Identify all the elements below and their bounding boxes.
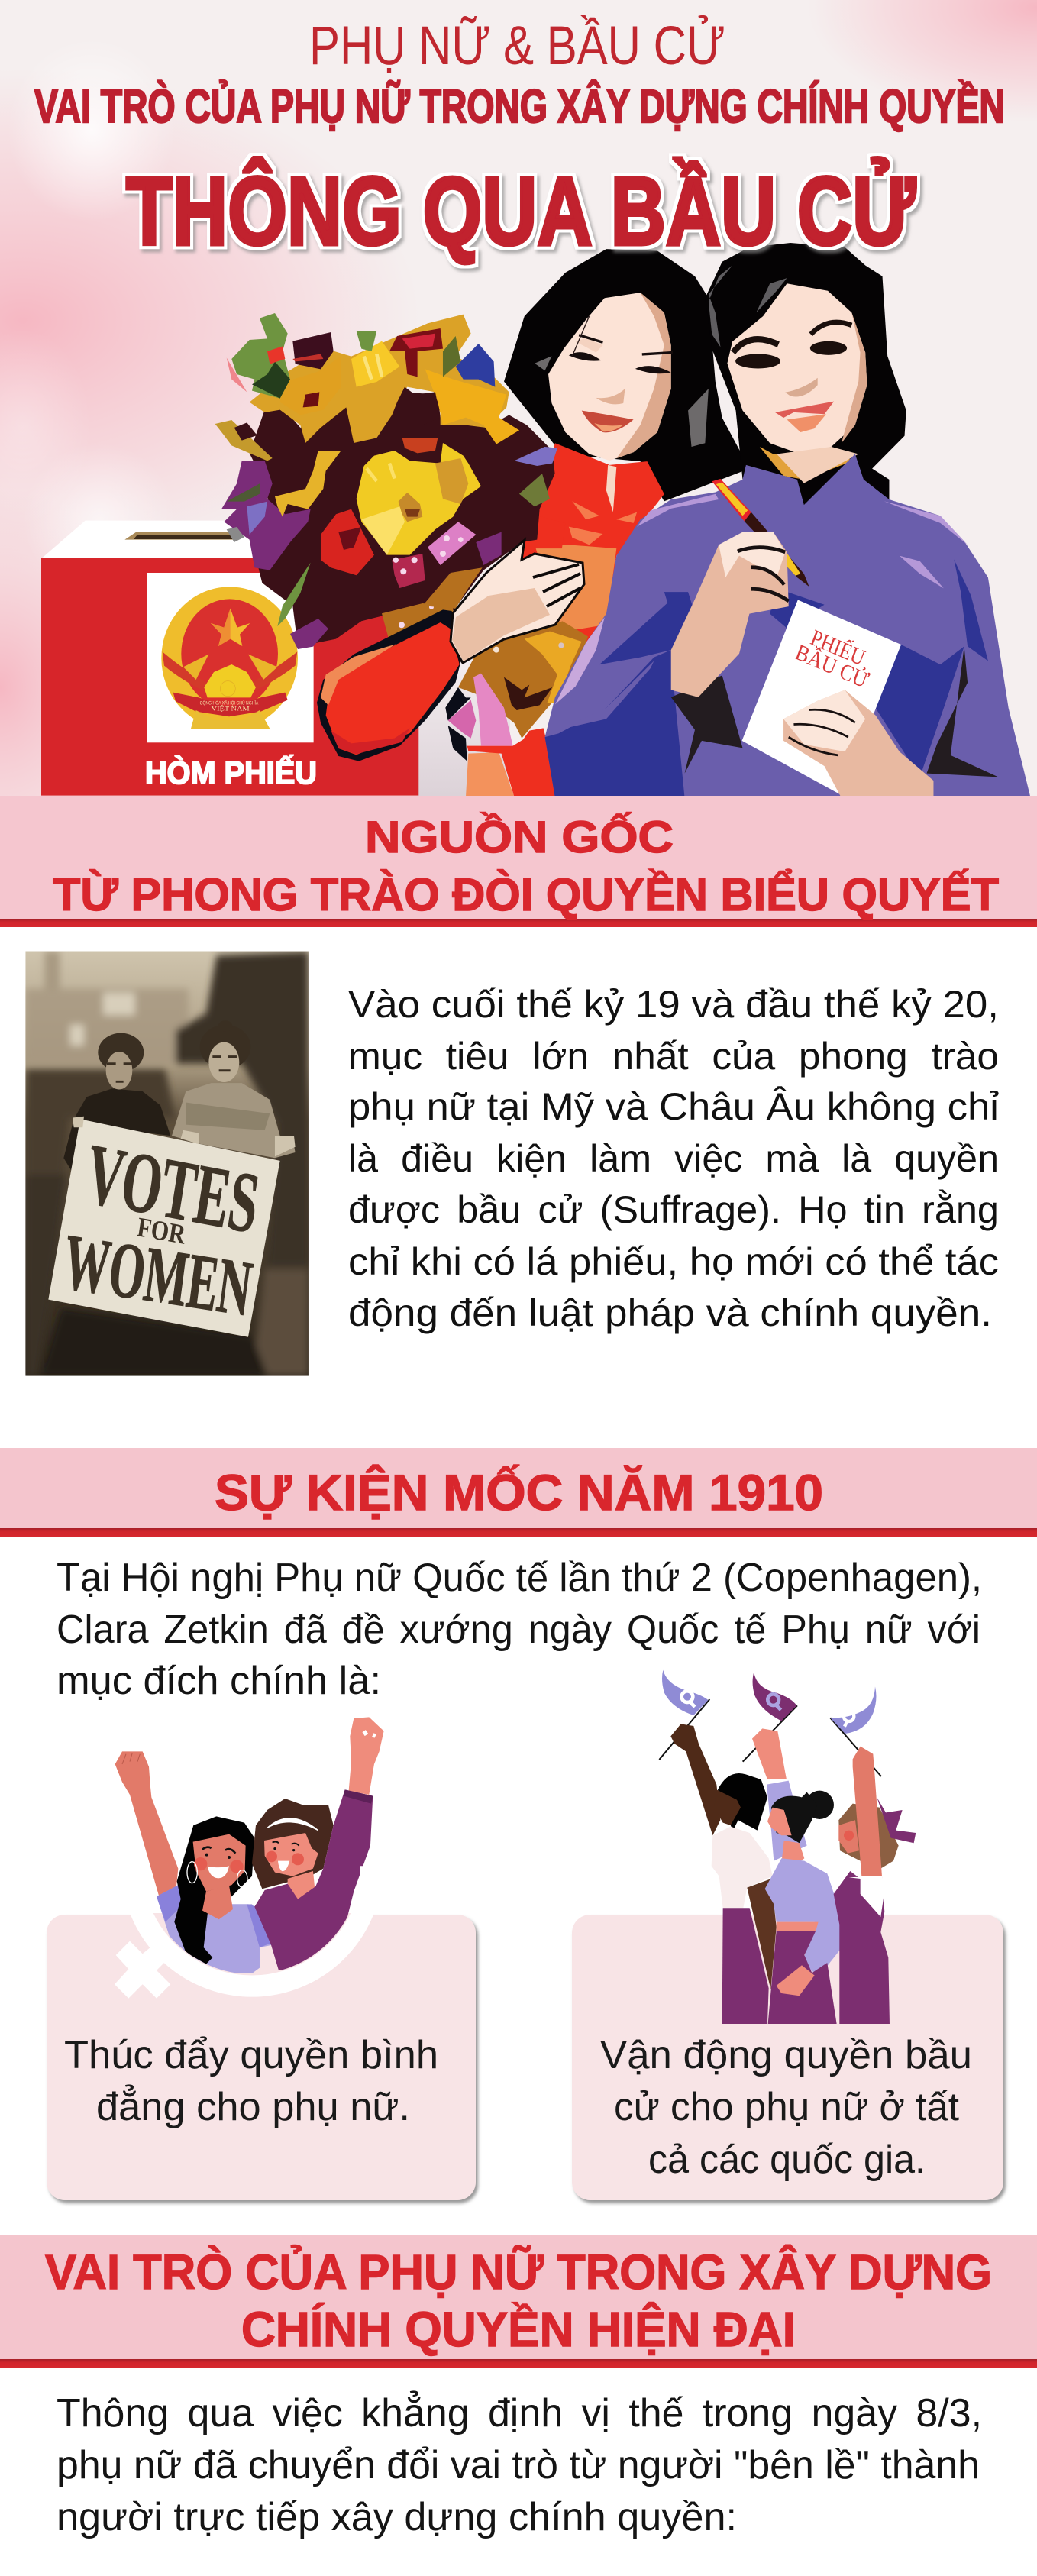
- banner: [48, 1117, 296, 1337]
- paragraph: modern role: [57, 2390, 982, 2539]
- hand holding pen: [671, 532, 789, 697]
- banner: FOR: [135, 1211, 188, 1250]
- section header: modern role: CHÍNH QUYỀN HIỆN ĐẠI: [241, 2301, 796, 2357]
- illustration: ballot paper: PHIẾU: [807, 623, 869, 671]
- ballot box: [41, 521, 418, 796]
- card text: voting rights: Vận động quyền bầu: [600, 2033, 972, 2077]
- paragraph: 1910 intro: [57, 1556, 982, 1703]
- icon: national emblem: CỘNG HÒA XÃ HỘI CHỦ NGHĨA: [200, 701, 258, 706]
- icon: national emblem: [161, 587, 298, 729]
- banner: VOTES: [79, 1126, 265, 1252]
- card text: voting rights: cử cho phụ nữ ở tất: [614, 2085, 960, 2129]
- paragraph: origin of suffrage: được bầu cử (Suffrage). Họ tin rằng: [348, 1188, 999, 1231]
- paragraph: origin of suffrage: Vào cuối thế kỷ 19 và đầu thế kỷ 20,: [348, 983, 999, 1026]
- hero background gradient: [0, 0, 1037, 796]
- card text: equality: đẳng cho phụ nữ.: [96, 2084, 410, 2129]
- paragraph: origin of suffrage: [348, 983, 999, 1334]
- section header: origin: NGUỒN GỐC: [365, 813, 674, 862]
- paragraph: origin of suffrage: chỉ khi có lá phiếu, họ mới có thể tác: [348, 1240, 999, 1283]
- section header: modern role: VAI TRÒ CỦA PHỤ NỮ TRONG XÂY DỰNG: [45, 2244, 992, 2300]
- card: voting rights: [572, 1670, 1003, 2200]
- section header: 1910: [0, 1448, 1037, 1537]
- title: kicker: PHỤ NỮ & BẦU CỬ: [309, 15, 725, 76]
- card: equality: [47, 1717, 476, 2200]
- paragraph: origin of suffrage: là điều kiện làm việc mà là quyền: [348, 1137, 999, 1180]
- section header: modern role: [0, 2235, 1037, 2368]
- illustration: left woman in red ao dai: [504, 249, 742, 643]
- icon: national emblem: VIỆT NAM: [212, 705, 250, 713]
- illustration: hand on bouquet: [451, 540, 584, 663]
- card text: equality: Thúc đẩy quyền bình: [64, 2033, 438, 2077]
- paragraph: 1910 intro: mục đích chính là:: [57, 1659, 381, 1703]
- photo: votes for women: [25, 951, 309, 1376]
- banner: WOMEN: [59, 1217, 257, 1333]
- section header: origin: TỪ PHONG TRÀO ĐÒI QUYỀN BIỂU QUYẾT: [53, 869, 999, 920]
- illustration: ballot paper: [742, 600, 901, 795]
- section header: 1910: SỰ KIỆN MỐC NĂM 1910: [215, 1464, 823, 1521]
- paragraph: 1910 intro: Tại Hội nghị Phụ nữ Quốc tế lần thứ 2 (Copenhagen),: [57, 1556, 982, 1600]
- card text: voting rights: [600, 2033, 972, 2182]
- paragraph: origin of suffrage: mục tiêu lớn nhất của phong trào: [348, 1035, 999, 1078]
- hand holding paper: [783, 690, 933, 798]
- label: ballot box: HÒM PHIẾU: [145, 755, 317, 790]
- illustration: flower bouquet: [215, 313, 557, 649]
- illustration: ballot paper: BẦU CỬ: [792, 638, 873, 693]
- right woman: [252, 1717, 384, 1970]
- card text: voting rights: cả các quốc gia.: [648, 2138, 926, 2182]
- paragraph: modern role: Thông qua việc khẳng định vị thế trong ngày 8/3,: [57, 2390, 982, 2435]
- women figures: [63, 1033, 296, 1170]
- icon: pen: [712, 479, 809, 587]
- section header: origin: [0, 796, 1037, 927]
- hero banner: [0, 0, 1037, 796]
- paragraph: origin of suffrage: phụ nữ tại Mỹ và Châu Âu không chỉ: [348, 1085, 999, 1128]
- paragraph: modern role: người trực tiếp xây dựng chính quyền:: [57, 2495, 737, 2539]
- paragraph: modern role: phụ nữ đã chuyển đổi vai trò từ người "bên lề" thành: [57, 2443, 980, 2487]
- illustration: skirt, sleeve and hand of left woman: [317, 609, 588, 797]
- paragraph: 1910 intro: Clara Zetkin đã đề xướng ngày Quốc tế Phụ nữ với: [57, 1608, 980, 1652]
- card text: equality: [64, 2033, 438, 2129]
- illustration: right woman in purple ao dai: [545, 243, 1031, 798]
- paragraph: origin of suffrage: động đến luật pháp và chính quyền.: [348, 1291, 992, 1334]
- left woman: [115, 1751, 273, 1973]
- illustration: two women cheering: [115, 1717, 384, 1999]
- illustration: three women with flags: [659, 1670, 916, 2024]
